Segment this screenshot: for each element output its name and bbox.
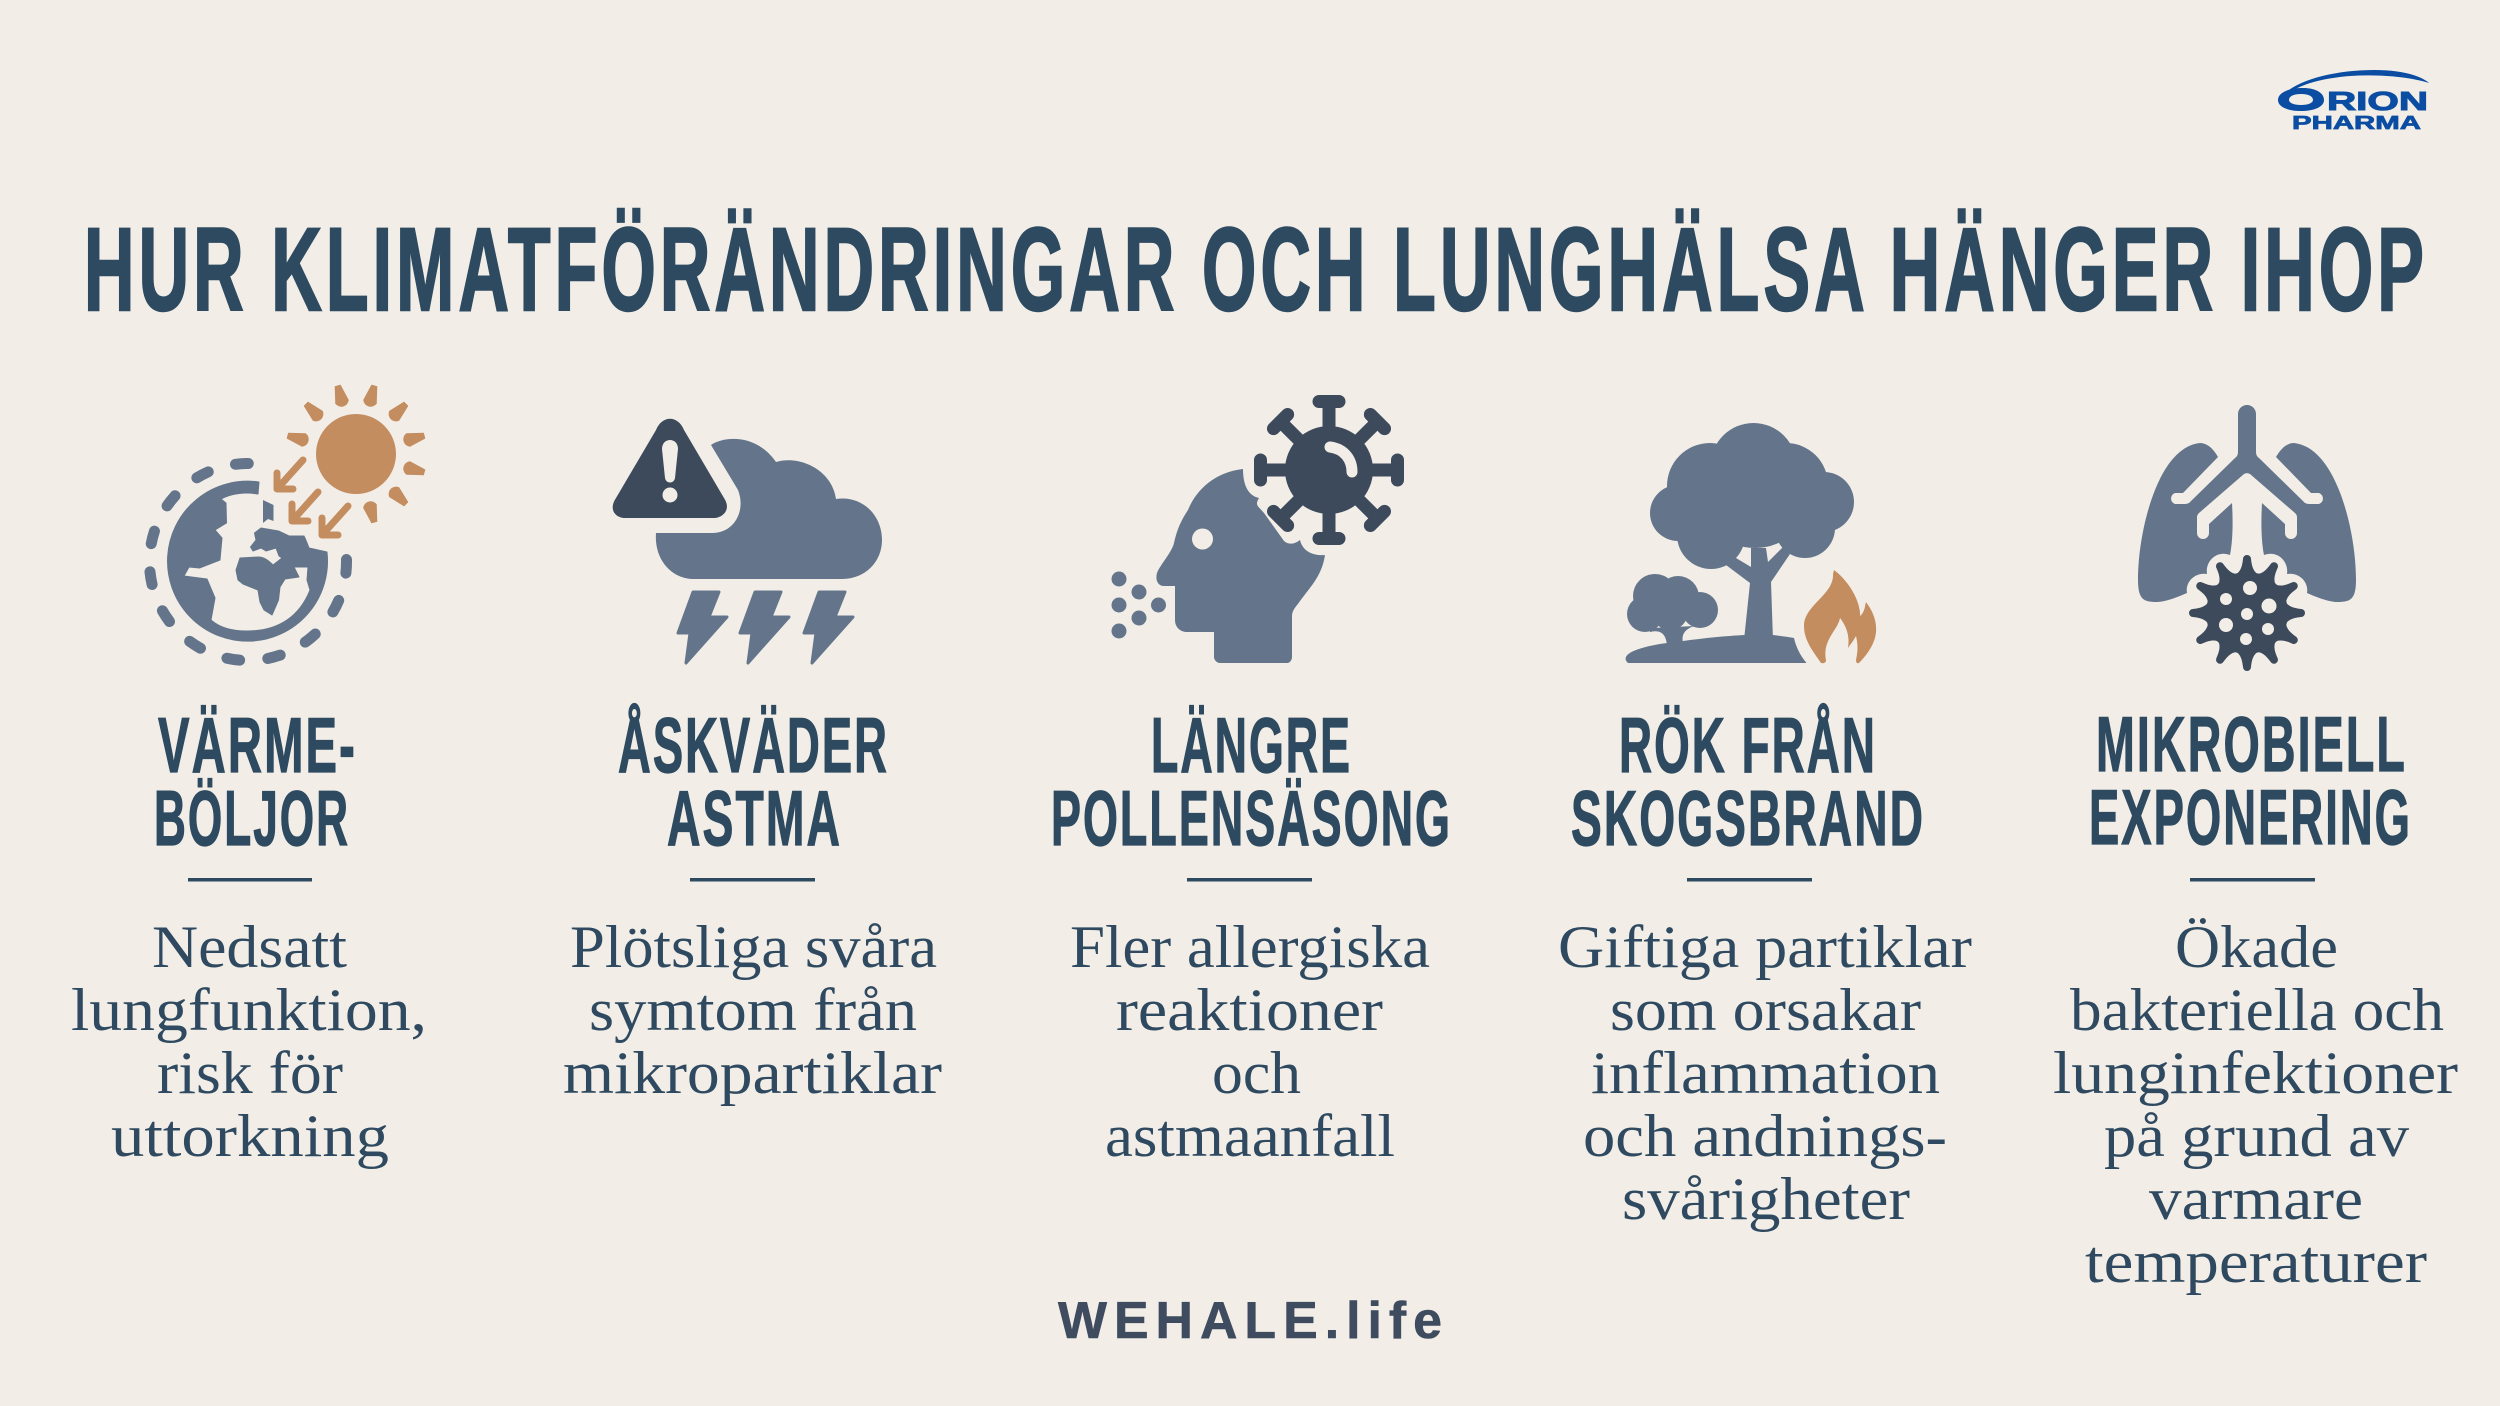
description: astmaanfall: [1105, 1103, 1395, 1169]
description: Plötsliga svåra: [570, 914, 937, 980]
description: Nedsatt: [152, 914, 347, 980]
icon: head with virus and pollen: [1112, 395, 1404, 663]
description: på grund av: [2104, 1103, 2409, 1169]
heading: BÖLJOR: [154, 774, 350, 862]
heading: [1051, 701, 1452, 862]
icon: tree with fire: [1626, 423, 1876, 663]
description: svårigheter: [1622, 1166, 1910, 1232]
heading: RÖK FRÅN: [1619, 701, 1877, 789]
description: [1558, 914, 1972, 1232]
description: lunginfektioner: [2053, 1040, 2458, 1106]
heading: ASTMA: [667, 774, 842, 862]
description: reaktioner: [1116, 977, 1383, 1043]
description: bakteriella och: [2070, 977, 2444, 1043]
heading: ÅSKVÄDER: [618, 701, 889, 789]
icon: lungs with microbe: [2138, 405, 2356, 671]
heading: [618, 701, 889, 862]
description: lungfunktion,: [71, 977, 427, 1043]
description: Ökade: [2175, 914, 2338, 980]
panel: rök från skogsbrand: [1558, 423, 1972, 1232]
description: och andnings-: [1583, 1103, 1947, 1169]
description: risk för: [157, 1040, 343, 1106]
description: och: [1212, 1040, 1301, 1106]
description: uttorkning: [111, 1103, 389, 1169]
logo: Orion Pharma: RION: [2327, 86, 2428, 116]
logo: Orion Pharma: PHARMA: [2292, 113, 2421, 133]
description: varmare: [2149, 1166, 2363, 1232]
heading: [2089, 700, 2412, 861]
description: [1070, 914, 1430, 1169]
heading: [1571, 701, 1925, 862]
panel: längre pollensäsong: [1051, 395, 1452, 1169]
footer: WEHALE.life: WEHALE.life: [1058, 1292, 1449, 1350]
icon: earth and sun: [148, 384, 426, 662]
description: Giftiga partiklar: [1558, 914, 1972, 980]
icon: storm cloud with warning: [613, 419, 882, 663]
panel: värmeböljor: [71, 384, 427, 1169]
panel: åskväder astma: [563, 419, 942, 1106]
heading: VÄRME-: [158, 701, 357, 789]
description: [563, 914, 942, 1106]
description: Fler allergiska: [1070, 914, 1430, 980]
heading: LÄNGRE: [1151, 701, 1352, 789]
description: symtom från: [589, 977, 917, 1043]
heading: POLLENSÄSONG: [1051, 774, 1452, 862]
description: mikropartiklar: [563, 1040, 942, 1106]
logo: Orion Pharma: [2278, 70, 2429, 133]
description: [71, 914, 427, 1169]
description: temperaturer: [2085, 1229, 2427, 1295]
description: som orsakar: [1610, 977, 1921, 1043]
heading: [154, 701, 357, 862]
description: [2053, 914, 2458, 1295]
description: inflammation: [1591, 1040, 1940, 1106]
heading: SKOGSBRAND: [1571, 774, 1925, 862]
panel: mikrobiell exponering: [2053, 405, 2458, 1295]
